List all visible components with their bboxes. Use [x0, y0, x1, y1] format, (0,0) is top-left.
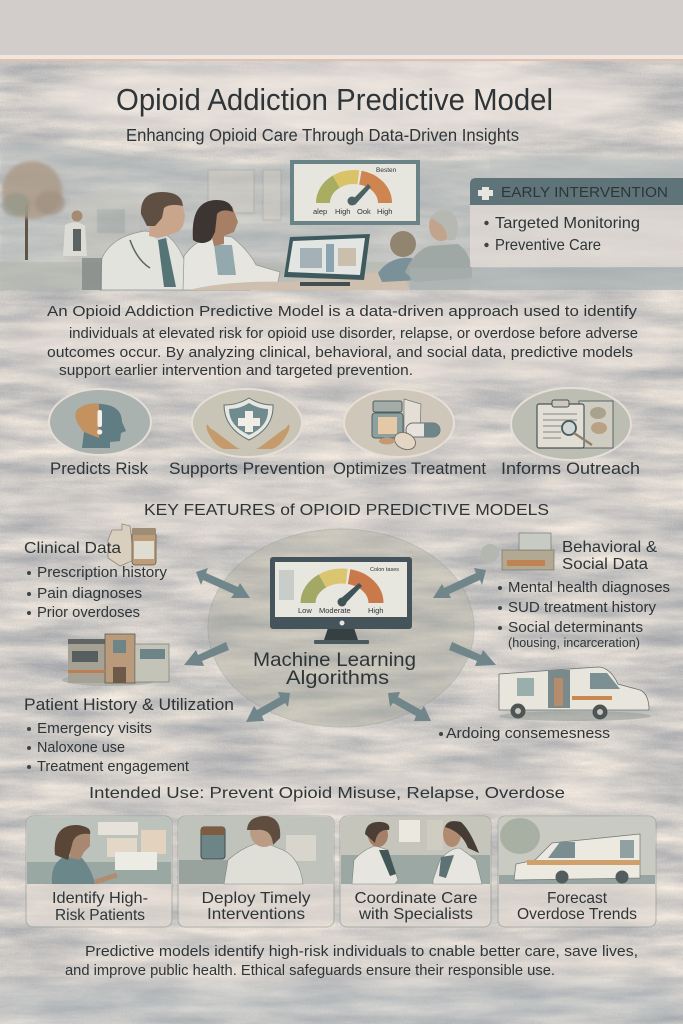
panel: clinical data: Prior overdoses — [37, 604, 140, 621]
closing statement: Predictive models identify high-risk individuals to cnable better care, save lives, — [85, 943, 638, 960]
icon labels: Informs Outreach — [501, 460, 640, 478]
panel: clinical data: Prescription history — [37, 564, 168, 581]
bullet: ardoing: Ardoing consemesness — [446, 725, 610, 742]
card: coordinate — [340, 816, 491, 927]
panel: clinical data — [24, 524, 168, 621]
hills backdrop — [0, 142, 683, 290]
intro paragraph — [47, 303, 638, 379]
laptop monitor on desk — [189, 234, 410, 290]
card: forecast: Overdose Trends — [517, 906, 637, 923]
arrow: lower left — [246, 692, 290, 722]
heading: machine learning: Algorithms — [286, 667, 389, 689]
bottom edge — [410, 268, 683, 290]
central monitor gauge: Colon tases — [370, 567, 399, 573]
callout: early intervention — [470, 178, 683, 267]
doctor with tie — [82, 192, 192, 290]
tree — [2, 161, 65, 260]
panel: patient history — [24, 696, 234, 775]
wall monitor: High — [377, 207, 392, 216]
icon: outreach van — [499, 667, 651, 721]
icon: puzzle cross — [478, 187, 493, 200]
arrow: lower right — [388, 692, 431, 721]
wall monitor: alep — [313, 207, 327, 216]
heading: machine learning: Machine Learning — [253, 649, 416, 671]
doctor with dark hair — [183, 200, 280, 290]
icon: informs outreach — [511, 388, 631, 460]
background clinician — [63, 210, 87, 256]
intro paragraph: support earlier intervention and targeted prevention. — [59, 362, 413, 379]
icon: supports prevention — [192, 389, 302, 457]
central monitor gauge: Low — [298, 606, 312, 615]
card: deploy: Deploy Timely — [202, 890, 310, 907]
card: coordinate: with Specialists — [358, 906, 473, 923]
heading: key features: KEY FEATURES of OPIOID PREDICTIVE MODELS — [144, 502, 549, 519]
panel: patient history: Naloxone use — [37, 739, 125, 756]
panel: patient history: Emergency visits — [37, 720, 152, 737]
central monitor gauge: Moderate — [319, 606, 351, 615]
callout: early intervention: Targeted Monitoring — [495, 215, 640, 232]
arrow: outreach van — [449, 642, 496, 666]
closing statement: and improve public health. Ethical safeguards ensure their responsible use. — [65, 962, 555, 979]
intro paragraph: individuals at elevated risk for opioid use disorder, relapse, or overdose before adverse — [69, 325, 638, 342]
icon: clinic building — [62, 634, 169, 686]
panel: behavioral and social data: (housing, incarceration) — [508, 635, 640, 650]
panel: behavioral and social data: Behavioral & — [562, 539, 657, 556]
card: deploy — [178, 816, 334, 927]
panel: patient history: Patient History & Utilization — [24, 696, 234, 714]
wall monitor: High — [335, 207, 350, 216]
top band — [0, 0, 683, 61]
heading: machine learning — [253, 649, 416, 689]
central monitor gauge — [270, 557, 412, 644]
panel: patient history: Treatment engagement — [37, 758, 190, 775]
hero scene — [0, 142, 683, 290]
callout: early intervention: EARLY INTERVENTION — [501, 184, 668, 201]
card: forecast: Forecast — [547, 890, 608, 907]
panel: behavioral and social data — [481, 533, 670, 650]
icon: community building — [481, 533, 554, 570]
central circle — [208, 529, 474, 727]
central monitor gauge: High — [368, 606, 383, 615]
card: identify — [26, 816, 172, 927]
icon labels: Optimizes Treatment — [333, 460, 486, 478]
icon labels: Predicts Risk — [50, 460, 149, 478]
panel: behavioral and social data: Social Data — [562, 556, 648, 573]
patients — [378, 210, 472, 282]
clinic walls — [70, 160, 683, 265]
wall monitor — [290, 160, 420, 225]
panel: behavioral and social data: Social determinants — [508, 619, 643, 636]
intro paragraph: An Opioid Addiction Predictive Model is a data-driven approach used to identify — [47, 303, 638, 320]
heading: intended use: Intended Use: Prevent Opioid Misuse, Relapse, Overdose — [89, 785, 565, 802]
callout: early intervention: Preventive Care — [495, 237, 601, 254]
icon: medicine jars — [108, 524, 156, 566]
closing statement — [65, 943, 638, 979]
wall monitor: Ook — [357, 207, 371, 216]
card: deploy: Interventions — [207, 906, 305, 923]
panel: behavioral and social data: Mental health diagnoses — [508, 579, 670, 596]
ground — [0, 262, 470, 290]
intro paragraph: outcomes occur. By analyzing clinical, behavioral, and social data, predictive models — [47, 344, 633, 361]
title: Opioid Addiction Predictive Model — [116, 82, 553, 117]
card: identify: Identify High- — [52, 890, 148, 907]
card: coordinate: Coordinate Care — [354, 890, 478, 907]
icon: optimizes treatment — [344, 389, 454, 457]
subtitle: Enhancing Opioid Care Through Data-Driven Insights — [126, 125, 519, 145]
arrow: patient history — [184, 642, 229, 666]
panel: clinical data: Clinical Data — [24, 540, 121, 557]
icon labels — [50, 460, 640, 478]
arrow: behavioral data — [433, 568, 486, 598]
panel: behavioral and social data: SUD treatment history — [508, 599, 657, 616]
card: identify: Risk Patients — [55, 907, 145, 924]
panel: clinical data: Pain diagnoses — [37, 585, 142, 602]
wall monitor: Besten — [376, 167, 397, 174]
icon labels: Supports Prevention — [169, 460, 325, 478]
card: forecast — [498, 816, 656, 927]
icon: predicts risk — [49, 389, 151, 455]
arrow: clinical data — [196, 568, 250, 598]
